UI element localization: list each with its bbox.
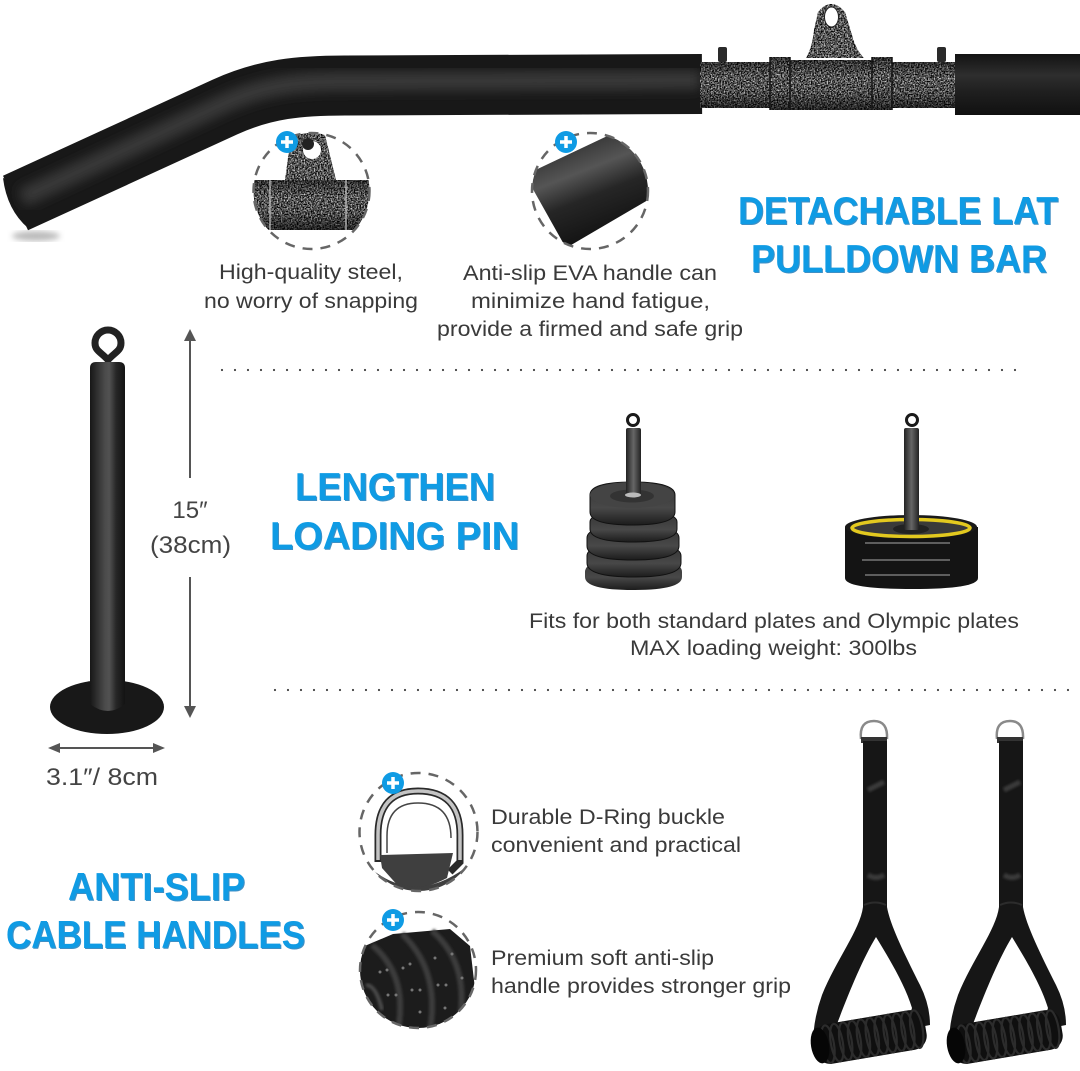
text: D-ring [491, 806, 741, 857]
text: anti-slip EVA handle [437, 262, 743, 341]
heading: detachable lat pulldown bar [738, 190, 1058, 281]
arrow: height [184, 329, 196, 718]
heading: anti-slip cable handles: CABLE HANDLES [6, 914, 305, 957]
icon: plus badge [555, 131, 577, 153]
arrow: base width [48, 743, 165, 753]
text: plate fit: MAX loading weight: 300lbs [630, 637, 917, 660]
olympic plates with pin [845, 414, 978, 589]
text: pin height: 15″ [172, 497, 208, 524]
cable handle right [944, 721, 1066, 1067]
text: high-quality steel: no worry of snapping [204, 290, 418, 313]
icon: plus badge [382, 772, 404, 794]
detail circle: D-ring [360, 772, 478, 895]
text: pin height: (38cm) [150, 532, 231, 559]
icon: plus badge [276, 131, 298, 153]
text: high-quality steel: High-quality steel, [219, 261, 403, 284]
text: pin height [150, 497, 231, 559]
cable handle left [808, 721, 930, 1067]
heading: lengthen loading pin [270, 466, 519, 558]
standard plates with pin [585, 414, 682, 590]
heading: anti-slip cable handles [6, 866, 305, 957]
text: soft grip: Premium soft anti-slip [491, 947, 714, 970]
text: base width: 3.1″/ 8cm [46, 764, 158, 791]
heading: lengthen loading pin: LENGTHEN [295, 466, 495, 509]
heading: detachable lat pulldown bar: DETACHABLE LAT [738, 190, 1058, 233]
text: D-ring: convenient and practical [491, 834, 741, 857]
text: plate fit [529, 610, 1019, 660]
icon: plus badge [382, 909, 404, 931]
detail circle: rubber grip [355, 909, 480, 1032]
text: high-quality steel [204, 261, 418, 313]
text: D-ring: Durable D-Ring buckle [491, 806, 725, 829]
sleeve: hammertone steel coupling [700, 4, 956, 110]
text: soft grip: handle provides stronger grip [491, 975, 791, 998]
text: anti-slip EVA handle: minimize hand fatigue, [471, 290, 710, 313]
loading pin [50, 330, 164, 734]
heading: detachable lat pulldown bar: PULLDOWN BAR [751, 238, 1047, 281]
heading: anti-slip cable handles: ANTI-SLIP [68, 866, 245, 909]
text: soft grip [491, 947, 791, 998]
heading: lengthen loading pin: LOADING PIN [270, 515, 519, 558]
detail circle: EVA grip [530, 131, 650, 250]
text: anti-slip EVA handle: provide a firmed and safe grip [437, 318, 743, 341]
lat pulldown bar [3, 4, 1080, 241]
text: anti-slip EVA handle: Anti-slip EVA handle can [463, 262, 717, 285]
detail circle: steel tab [250, 131, 374, 249]
text: plate fit: Fits for both standard plates and Olympic plates [529, 610, 1019, 633]
